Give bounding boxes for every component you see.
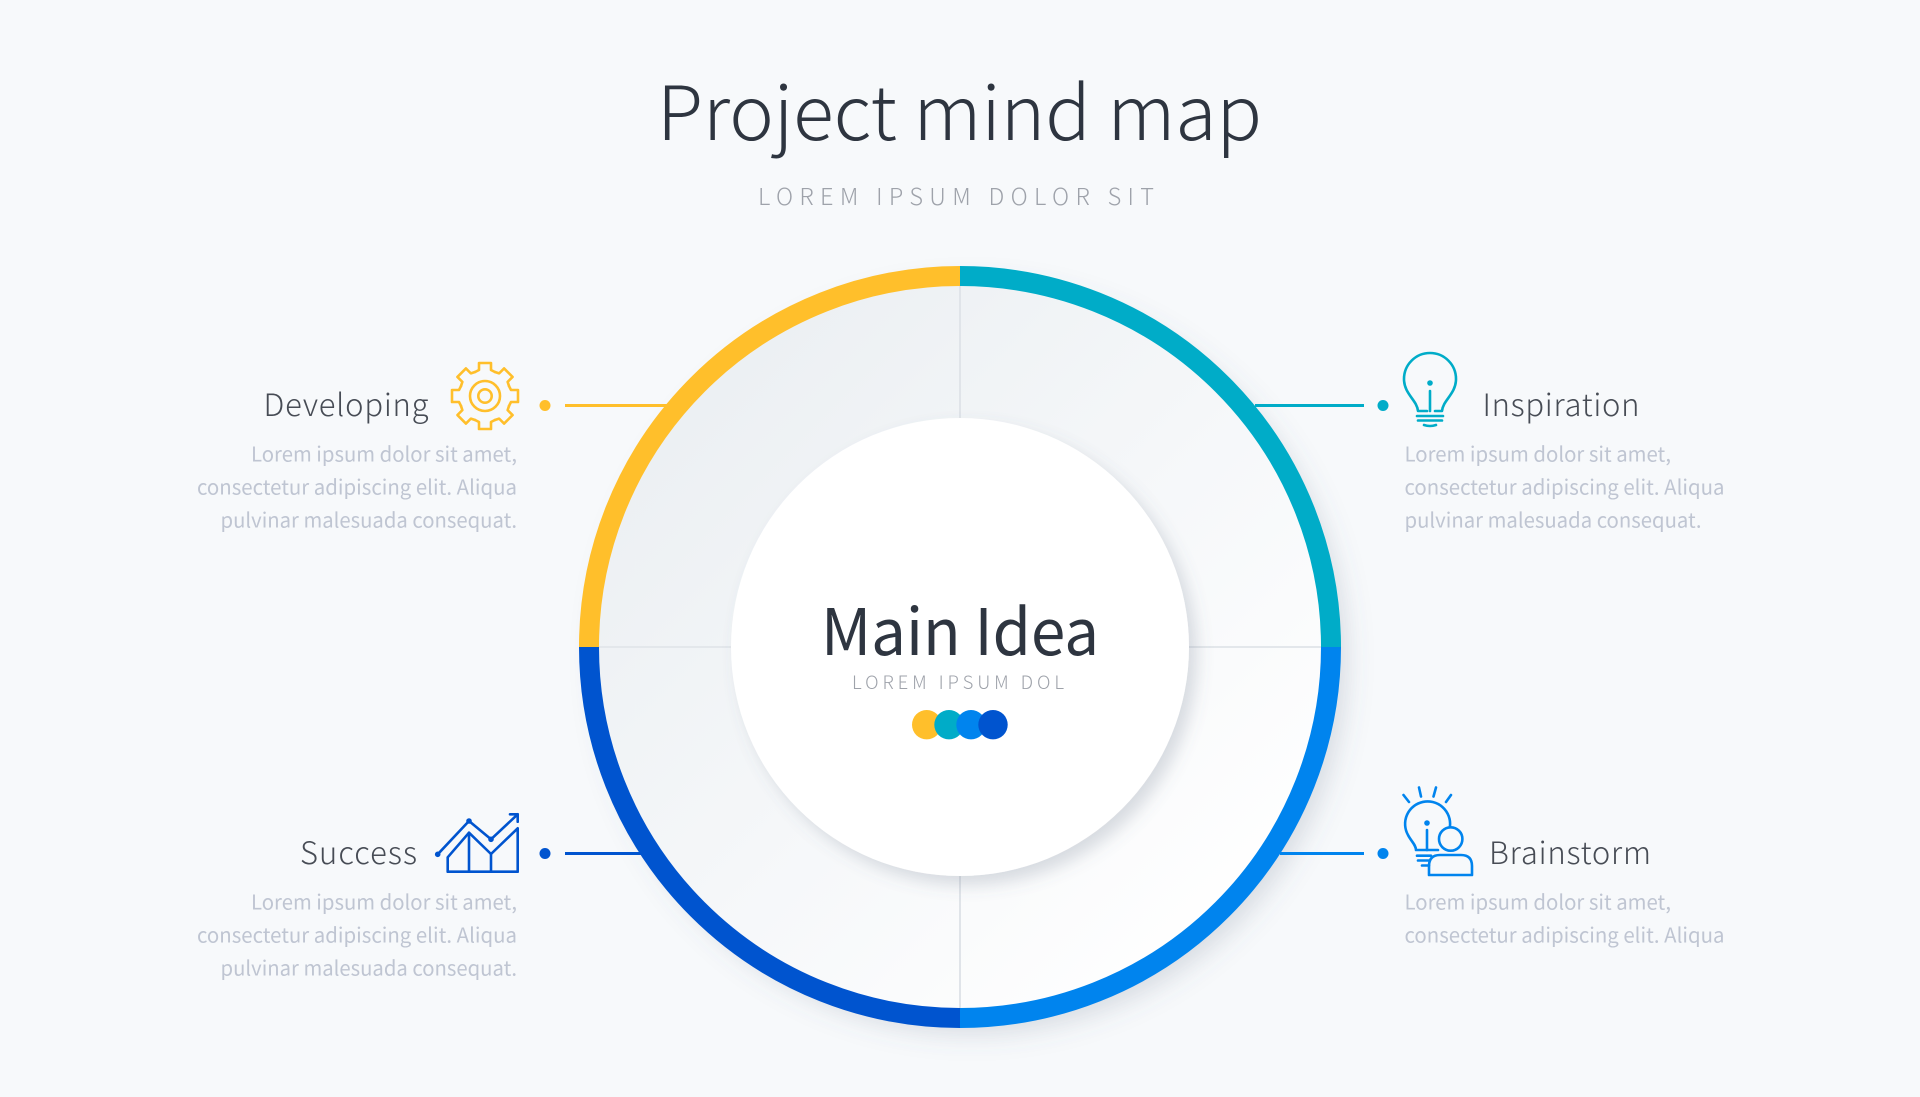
ring segment: brainstorm <box>960 647 1331 1018</box>
color dots <box>912 710 1008 739</box>
heading: inspiration: Inspiration <box>1482 380 1640 425</box>
title: Project mind map <box>657 53 1262 162</box>
text: brainstorm description <box>1404 886 1724 948</box>
connector: success <box>540 848 642 859</box>
ring segment: developing <box>589 276 960 647</box>
text: developing description: Lorem ipsum dolor sit amet, <box>251 438 517 468</box>
text: inspiration description: consectetur adipiscing elit. Aliqua <box>1404 470 1724 500</box>
text: brainstorm description: Lorem ipsum dolor sit amet, <box>1404 886 1671 916</box>
text: developing description <box>197 438 517 534</box>
connector: inspiration <box>1255 400 1388 411</box>
text: success description: pulvinar malesuada consequat. <box>220 952 517 982</box>
disc background <box>585 272 1335 1022</box>
heading: brainstorm: Brainstorm <box>1489 828 1651 873</box>
connector: developing <box>540 400 668 411</box>
block: brainstorm <box>1404 828 1724 948</box>
icon: light bulb <box>1404 353 1456 426</box>
text: brainstorm description: consectetur adipiscing elit. Aliqua <box>1404 918 1724 948</box>
heading: success: Success <box>300 828 417 873</box>
main idea subtitle: LOREM IPSUM DOL <box>852 669 1064 695</box>
icon: growth chart <box>435 814 518 872</box>
main idea heading: Main Idea <box>821 582 1099 674</box>
connector: brainstorm <box>1280 848 1388 859</box>
heading: developing: Developing <box>264 380 429 425</box>
icon: brainstorm <box>1404 788 1472 875</box>
block: success <box>197 828 517 982</box>
text: success description: consectetur adipiscing elit. Aliqua <box>197 918 517 948</box>
text: success description: Lorem ipsum dolor sit amet, <box>251 886 517 916</box>
icon: gear <box>452 363 518 429</box>
ring segment: inspiration <box>960 276 1331 647</box>
text: inspiration description: pulvinar malesuada consequat. <box>1404 504 1702 534</box>
text: developing description: consectetur adipiscing elit. Aliqua <box>197 470 517 500</box>
subtitle: LOREM IPSUM DOLOR SIT <box>758 178 1154 212</box>
ring segment: success <box>589 647 960 1018</box>
text: inspiration description <box>1404 438 1724 534</box>
block: inspiration <box>1404 380 1724 534</box>
block: developing <box>197 380 517 534</box>
text: developing description: pulvinar malesuada consequat. <box>220 504 517 534</box>
text: inspiration description: Lorem ipsum dolor sit amet, <box>1404 438 1671 468</box>
center circle <box>731 418 1189 876</box>
text: success description <box>197 886 517 982</box>
mind map circle <box>585 272 1335 1022</box>
